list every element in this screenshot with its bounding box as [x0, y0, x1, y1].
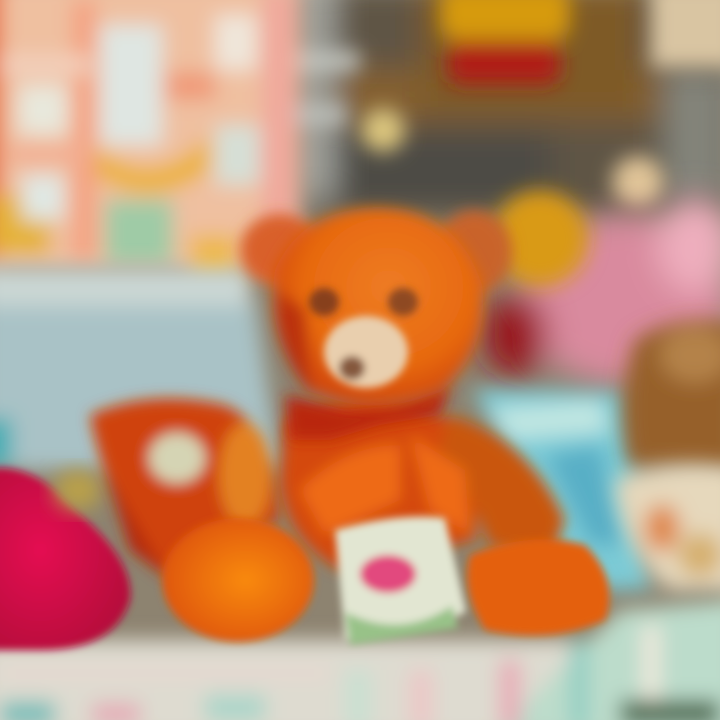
bear snout	[324, 316, 408, 388]
toy: yellow scrap beside heart	[54, 470, 102, 510]
bear body	[280, 402, 565, 570]
blanket: turquoise cloth at right	[472, 388, 650, 590]
toy: yellow plush behind bear	[492, 190, 588, 286]
decoration: beige panel top right and glowing lights	[361, 0, 720, 208]
bear head	[273, 208, 483, 406]
toy: small orange plush	[90, 398, 278, 580]
table: striped pastel cloth	[0, 600, 720, 720]
toy: cream plush at right edge	[615, 464, 720, 590]
card: small card with pink heart	[335, 516, 466, 645]
toy: brown teddy at right edge	[624, 320, 720, 470]
bear red bow	[285, 385, 450, 440]
bear ears	[240, 210, 512, 294]
toy: pink plush at right	[483, 197, 720, 385]
bear eyes	[309, 288, 418, 316]
quilt: colourful wall hanging at top left	[0, 0, 360, 280]
bear foot	[467, 539, 610, 636]
bear: central orange teddy	[240, 208, 610, 636]
box: pale blue storage box at left	[0, 268, 280, 470]
toy: orange ball foot	[162, 518, 314, 642]
toy: red heart pillow	[0, 468, 130, 650]
toy: yellow and red toy on shelf	[440, 0, 570, 84]
